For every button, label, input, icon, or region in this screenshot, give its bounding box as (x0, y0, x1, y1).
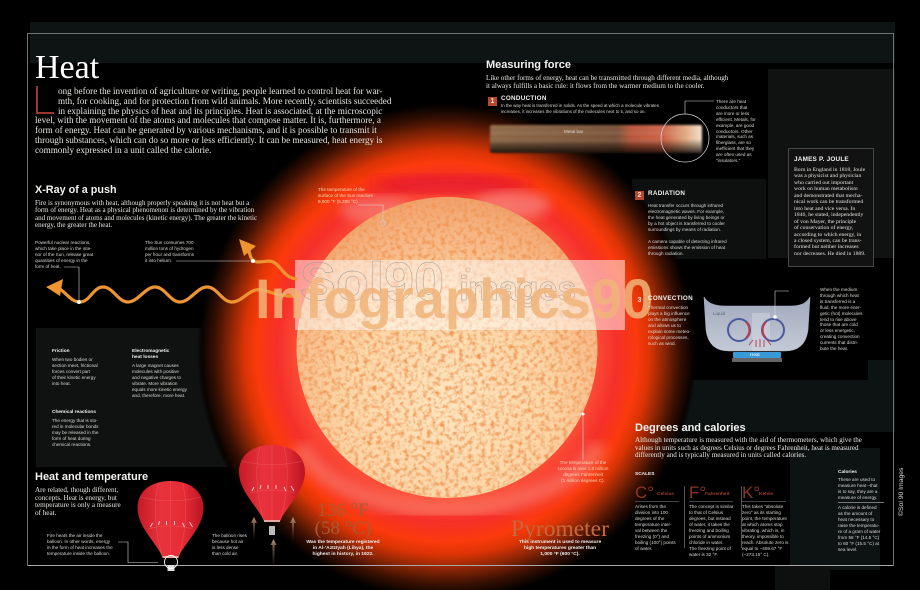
panel: friction: section meet, frictional (52, 363, 98, 368)
caption: corona temperature: corona is over 1.8 million (558, 466, 608, 471)
leader nodes (77, 220, 584, 416)
caption: sun consumes hydrogen: million tons of hydrogen (145, 246, 194, 251)
record temperature figure (315, 500, 371, 539)
measuring force text: it always fulfills a basic rule: it flows from the warmer medium to the cooler. (486, 82, 704, 90)
james joule biography: nical work can be transformed (794, 199, 863, 205)
x-ray text: energy, the greater the heat. (35, 221, 112, 229)
panel: electromagnetic heat losses: and negative charges to (132, 375, 181, 380)
panel: chemical reactions: form of heat during (52, 436, 91, 441)
wave arrow: emitted heat, short wave (239, 239, 296, 279)
scale: kelvin: zero" as its starting (742, 510, 781, 515)
text: of water. (635, 546, 652, 551)
x-ray text: form of energy. Heat as a physical phenomenon is determined by the vibration (35, 206, 254, 214)
conduction heading: CONDUCTION (501, 95, 547, 102)
watermark text: Infographics90 (255, 267, 653, 330)
caption: corona temperature: (1 million degrees C). (561, 478, 605, 483)
convection text: such as wind. (648, 341, 676, 346)
badge 3: 3 (638, 297, 641, 304)
text: "insulators." (716, 158, 740, 163)
scale: kelvin: Kelvin (759, 492, 773, 497)
badge 1 (488, 97, 497, 106)
scale: celsius (635, 483, 679, 551)
panel: electromagnetic heat losses: vibrate. More vibration (132, 381, 177, 386)
caption: balloon rises (212, 533, 247, 556)
calories note: heat necessary to (838, 517, 874, 522)
heading: degrees and calories: Degrees and calories (635, 422, 746, 434)
calories note: as the amount of (838, 511, 872, 516)
record temperature figure: 136 °F (317, 500, 369, 521)
radiation text: by a hot object is transferred to cooler (648, 221, 725, 226)
heat and temperature text: Are related, though different, (35, 486, 118, 494)
measuring force text (486, 74, 728, 90)
scale: celsius: boiling (100°) points (635, 540, 676, 545)
conduction text: In the way heat is transferred in solids. As the speed at which a molecule vibrates (501, 103, 659, 108)
panel: friction: forces convert part (52, 369, 90, 374)
conductors note: example, are good (716, 123, 754, 128)
caption: sun consumes hydrogen: per hour and transforms (145, 252, 194, 257)
calories note: Calories (838, 470, 857, 475)
scale: fahrenheit: freezing and boiling (689, 528, 729, 533)
heading: heat and temperature: Heat and temperature (35, 471, 148, 483)
caption: sun consumes hydrogen (145, 240, 194, 263)
caption: surface temperature (318, 187, 373, 204)
convection note: or less energetic, (820, 328, 855, 333)
caption: corona temperature: The temperature of the (560, 460, 606, 465)
sun corona pink and crimson bands (300, 175, 600, 509)
scale: kelvin: theory, impossible to (742, 534, 784, 539)
convection note: When the medium (820, 287, 857, 292)
intro text: commonly expressed in a unit called the calorie. (35, 145, 211, 155)
degrees text: Although temperature is measured with the aid of thermometers, which give the (635, 436, 862, 444)
radiation text (648, 203, 727, 256)
panel: electromagnetic heat losses: heat losses (132, 355, 158, 360)
panel: chemical reactions: red in molecular bonds (52, 424, 98, 429)
heat and temperature text: temperature is only a measure (35, 501, 121, 509)
convection heading: CONVECTION (648, 295, 693, 302)
degrees text: differently and is typically measured in units called calories. (635, 451, 806, 459)
conductors note: inefficient that they (716, 146, 754, 151)
convection: vessel on burner (704, 291, 810, 362)
pyrometer text: 1,000 °F (600 °C). (540, 552, 580, 557)
conductors note (716, 99, 756, 163)
scale: fahrenheit: to that of Celsius (689, 510, 723, 515)
radiation text: emissions shows the emission of heat (648, 245, 725, 250)
caption: nuclear reactions: form of heat. (35, 264, 61, 269)
heading: x-ray of a push: X-Ray of a push (35, 184, 117, 196)
calories note: A calorie is defined (838, 505, 877, 510)
james joule biography: and demonstrated that mecha- (794, 193, 862, 199)
caption: fire heats air: balloon. In other words, energy (47, 539, 110, 544)
convection note: currents that distri- (820, 340, 858, 345)
watermark band (295, 260, 625, 330)
degrees text: values in units such as degrees Celsius or degrees Fahrenheit, heat is measured (635, 444, 859, 452)
radiation text: through radiation. (648, 251, 684, 256)
caption: surface temperature: The temperature of the (318, 187, 365, 192)
sun disc with granulated surface (296, 196, 598, 499)
panel: electromagnetic heat losses: molecules with positive (132, 369, 179, 374)
radiation heading: RADIATION (648, 190, 685, 197)
panel: chemical reactions: The energy that is sto- (52, 418, 98, 423)
scale: celsius: C° (635, 483, 654, 502)
caption: sun consumes hydrogen: it into helium. (145, 258, 172, 263)
james joule biography (794, 156, 866, 257)
measuring force text: Like other forms of energy, heat can be transmitted through different media, although (486, 74, 728, 82)
caption: corona temperature (558, 460, 608, 483)
panel: chemical reactions: chemical reactions. (52, 442, 91, 447)
panel: electromagnetic heat losses: and, therefore, more heat. (132, 393, 185, 398)
radiation text: Heat transfer occurs through infrared (648, 203, 723, 208)
james joule biography: a closed system, can be trans- (794, 238, 862, 244)
conductors note: are often used as (716, 152, 752, 157)
james joule biography: Born in England in 1818, Joule (794, 167, 865, 173)
panel: friction (52, 348, 98, 386)
scale: kelvin: vibrating, which is, in (742, 528, 784, 533)
badge 2: 2 (638, 192, 641, 199)
calories note: measure of energy. (838, 495, 877, 500)
title: Heat (35, 49, 99, 86)
x-ray text: Fire is synonymous with heat, although properly speaking it is not heat but a (35, 199, 249, 207)
intro text: ong before the invention of agriculture or writing, people learned to control heat for war- (58, 86, 382, 96)
convection text (648, 305, 691, 346)
caption: fire heats air: in the form of heat increases the (47, 545, 113, 550)
caption: surface temperature: 9,600 °F (5,300 °C) (318, 199, 358, 204)
panel: friction: of their kinetic energy (52, 375, 96, 380)
caption: surface temperature: surface of the Sun reaches (318, 193, 373, 198)
conduction text: increases, it increases the vibrations of the molecules next to it, and so on. (501, 109, 646, 114)
caption: fire heats air (47, 533, 113, 556)
joule name: JAMES P. JOULE (794, 156, 849, 163)
record temperature text: in Al-‘Azīzīyah (Libya), the (313, 546, 373, 551)
panel: chemical reactions (52, 410, 98, 447)
text: equal to −459.67 °F (742, 546, 782, 551)
balloon: right (239, 445, 305, 535)
convection note: through which heat (820, 293, 859, 298)
convection note: getic (hot) molecules (820, 311, 862, 316)
calories note: re of a gram of water (838, 529, 880, 534)
scale: kelvin: point, the temperature (742, 516, 787, 521)
badge 1: 1 (491, 98, 494, 105)
conduction text (501, 103, 659, 114)
heat and temperature text: of heat. (35, 508, 56, 516)
intro text: mth, for cooking, and for protection from wild animals. More recently, scientists succeeded (58, 96, 391, 106)
scales label: SCALES (635, 472, 654, 477)
convection text: explain some meteo- (648, 329, 691, 334)
calories note: raise the temperatu- (838, 523, 879, 528)
caption: balloon rises: because hot air (212, 539, 243, 544)
calories note: from 58 °F (14.5 °C) (838, 535, 879, 540)
convection note: creating convection (820, 334, 860, 339)
heading: measuring force: Measuring force (486, 59, 571, 71)
caption: sun consumes hydrogen: The Sun consumes 700 (145, 240, 194, 245)
text: (−273.15° C). (742, 552, 770, 557)
intro text: level, with the movement of the atoms and molecules that compose matter. It is, furthermore, a (35, 115, 381, 125)
conductors note: are more or less (716, 111, 749, 116)
x-ray text: and movement of atoms and molecules (kinetic energy). The greater the kinetic (35, 214, 257, 222)
radiation text: the heat generated by living beings or (648, 215, 725, 220)
joule box outline (788, 148, 874, 266)
james joule biography: 1846, he stated, independently (794, 212, 863, 218)
convection text: on the atmosphere (648, 317, 686, 322)
james joule biography: into heat and vice versa. In (794, 206, 855, 212)
record temperature text: Was the temperature registered (306, 540, 380, 545)
conductors note: efficient. Metals, for (716, 117, 756, 122)
scale: fahrenheit: points of ammonium (689, 534, 730, 539)
panel: chemical reactions: may be released in the (52, 430, 98, 435)
degrees text (635, 436, 862, 459)
scale: fahrenheit: chloride in water. (689, 540, 723, 545)
scale: celsius: temperature inter- (635, 522, 672, 527)
panel: friction: Friction (52, 349, 70, 354)
caption: nuclear reactions: rior of the Sun, release great (35, 252, 93, 257)
intro text: through substances, which can do so more or less efficiently. It can be measured, heat energy is (35, 135, 382, 145)
calories note: These are used to (838, 477, 875, 482)
scale: fahrenheit: F° (689, 483, 706, 502)
intro text: form of energy. Heat can be generated by various mechanisms, and it is possible to transmit it (35, 125, 377, 135)
caption: fire heats air: temperature inside the balloon. (47, 551, 110, 556)
scale: celsius: division into 100 (635, 510, 668, 515)
text: The freezing point of (689, 546, 731, 551)
conductors note: fiberglass, are so (716, 140, 751, 145)
conductors note: conductors. Other (716, 129, 753, 134)
pyrometer text: This instrument is used to measure (519, 540, 601, 545)
record temperature text: highest in history, in 1922. (312, 552, 374, 557)
scale: celsius: val between the (635, 528, 667, 533)
radiation text: electromagnetic waves. For example, (648, 209, 724, 214)
intro text (35, 86, 392, 155)
conductors note: materials, such as (716, 134, 753, 139)
convection note: tend to rise above (820, 317, 857, 322)
calories note: to 60 °F (15.5 °C) at (838, 541, 879, 546)
caption: balloon rises: is less dense (212, 545, 239, 550)
scale: fahrenheit: of water, it takes the (689, 522, 730, 527)
panel: electromagnetic heat losses: A large magnet causes (132, 363, 179, 368)
convection note: those that are cold (820, 322, 858, 327)
balloon: left (138, 481, 204, 571)
scale: kelvin (742, 483, 788, 557)
scale: kelvin: reach. Absolute zero is (742, 540, 788, 545)
scale: celsius: freezing (0°) and (635, 534, 669, 539)
convection text: rological processes, (648, 335, 689, 340)
caption: balloon rises: than cold air. (212, 551, 238, 556)
scale: fahrenheit: Fahrenheit (705, 492, 730, 497)
burner label: Heat (750, 352, 760, 357)
caption: nuclear reactions: which take place in the inte- (35, 246, 92, 251)
scale: celsius: Celsius (657, 492, 674, 497)
calories note: sea level. (838, 547, 857, 552)
convection text: Thermal convection (648, 305, 688, 310)
x-ray text (35, 199, 257, 229)
panel: electromagnetic heat losses: equals more kinetic energy (132, 387, 187, 392)
calories note: is to say, they are a (838, 489, 878, 494)
intro text: in explaining the physics of heat and its principles. Heat is associated, at the microscopic (58, 106, 382, 116)
record temperature figure: (58 °C) (315, 518, 371, 539)
james joule biography: nor decreases. He died in 1889. (794, 251, 866, 257)
caption: corona temperature: degrees Fahrenheit (563, 472, 603, 477)
james joule biography: work on human metabolism (794, 186, 858, 192)
scale: kelvin: K° (742, 483, 760, 502)
text: water is 32 °F. (689, 552, 718, 557)
scale dividers (684, 486, 742, 548)
scale: fahrenheit: degrees, but instead (689, 516, 731, 521)
text: bute the heat. (820, 346, 848, 351)
intro drop cap (36, 86, 54, 114)
pyrometer text: high temperatures greater than (524, 546, 596, 551)
convection note: is transferred is a (820, 299, 855, 304)
conductors note: There are heat (716, 99, 746, 104)
panel: chemical reactions: Chemical reactions (52, 410, 96, 415)
radiation text: A camera capable of detecting infrared (648, 239, 727, 244)
calories note: measure heat –that (838, 483, 878, 488)
pyrometer text (518, 540, 602, 557)
vessel label: Liquid (713, 311, 725, 316)
conductors note: conductors that (716, 105, 747, 110)
caption: nuclear reactions: quantities of energy in the (35, 258, 88, 263)
badge 2 (635, 191, 644, 200)
panel: friction: into heat. (52, 381, 71, 386)
panel: friction: When two bodies or (52, 357, 93, 362)
convection note: fluid, the more ener- (820, 305, 861, 310)
wave arrow: emitted heat, long wave (46, 279, 296, 302)
scale: kelvin: This takes "absolute (742, 504, 783, 509)
leader lines (64, 101, 714, 562)
pyrometer heading: Pyrometer (511, 516, 609, 542)
heat and temperature text: concepts. Heat is energy, but (35, 494, 117, 502)
panel: electromagnetic heat losses: Electromagnetic (132, 349, 169, 354)
james joule biography: of von Mayer, the principle (794, 219, 856, 225)
james joule biography: who carried out important (794, 180, 853, 186)
james joule biography: of conservation of energy, (794, 225, 853, 231)
rising air arrows (251, 517, 296, 568)
conduction: heated metal bar (490, 114, 709, 162)
record temperature text (306, 540, 380, 557)
james joule biography: formed but neither increases (794, 244, 859, 250)
convection text: and allows us to (648, 323, 681, 328)
convection text: plays a big influence (648, 311, 690, 316)
caption: fire heats air: Fire heats the air inside the (47, 533, 102, 538)
caption: nuclear reactions (35, 240, 94, 269)
scale: fahrenheit: The concept is similar (689, 504, 733, 509)
panel: electromagnetic heat losses (132, 348, 187, 398)
sun corona glow (197, 102, 697, 590)
scale: celsius: degrees of the (635, 516, 664, 521)
james joule biography: was a physicist and physician (794, 173, 861, 179)
radiation text: surroundings by means of radiation. (648, 227, 721, 232)
scale: fahrenheit (689, 483, 734, 557)
credit: ©Sol 90 Images (898, 468, 905, 516)
calories note (838, 470, 884, 552)
caption: nuclear reactions: Powerful nuclear reactions, (35, 240, 90, 245)
scale: kelvin: at which atoms stop (742, 522, 783, 527)
james joule biography: according to which energy, in (794, 232, 861, 238)
convection note (820, 287, 862, 351)
metal bar label: Metal bar (564, 129, 583, 134)
heat and temperature text (35, 486, 121, 516)
caption: balloon rises: The balloon rises (212, 533, 247, 538)
scale: celsius: Arises from the (635, 504, 666, 509)
